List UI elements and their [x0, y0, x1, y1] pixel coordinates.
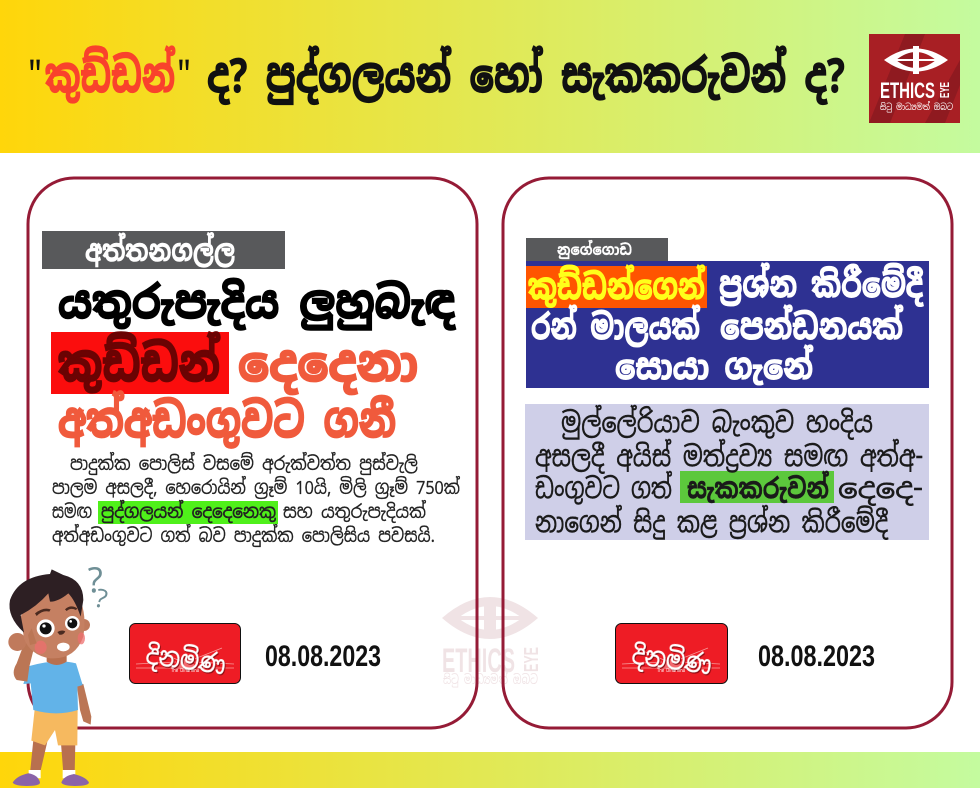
panel: right clipping — [503, 178, 952, 728]
Dinamina logo right: දිනමිණ — [630, 637, 714, 682]
location tag right — [526, 238, 668, 261]
boy face — [21, 588, 84, 658]
body text left: පුද්ගලයන් දෙදෙනෙකු — [101, 500, 276, 524]
boy shoes — [13, 773, 89, 786]
boy socks — [29, 770, 75, 778]
watermark logo: ETHICS — [442, 642, 515, 680]
Ethics Eye logo: ETHICS — [880, 78, 935, 103]
body box right: සැකකරුවන් — [687, 470, 830, 507]
body text left: සමඟ — [52, 500, 92, 524]
boy neck — [47, 653, 67, 665]
boy hair — [9, 569, 83, 633]
Dinamina logo left — [130, 624, 240, 684]
watermark logo — [442, 597, 543, 688]
boy fingers — [28, 628, 37, 645]
location tag right: නුගේගොඩ — [557, 240, 632, 260]
body box right: නාගෙන් සිදු කළ ප්‍රශ්න කිරීමේදී — [535, 504, 889, 541]
date right: 08.08.2023 — [758, 640, 875, 673]
question marks — [87, 559, 111, 617]
boy legs — [30, 740, 75, 773]
headline box right: සොයා ගැනේ — [615, 344, 814, 390]
question marks: ? — [87, 559, 103, 604]
headline line 3: අත්අඩංගුවට ගනී — [58, 389, 396, 451]
boy eyes — [37, 616, 80, 637]
body box right: මුල්ලේරියාව බැංකුව හංදිය — [561, 405, 873, 441]
headline line 2 — [51, 330, 418, 396]
Ethics Eye logo: EYE — [937, 82, 952, 98]
headline line 2: දෙදෙනා — [238, 330, 418, 396]
headline box right: කුඩ්ඩන්ගෙන් — [528, 264, 706, 310]
title: කුඩ්ඩන් — [45, 44, 175, 106]
Dinamina logo right: The Dinamina — [657, 668, 685, 674]
body box right: දෙදෙ- — [838, 471, 923, 507]
body text left — [52, 451, 460, 548]
boy brow and nose — [35, 606, 77, 635]
Dinamina logo left: දිනමිණ — [144, 637, 228, 682]
boy mouth — [57, 643, 70, 651]
watermark logo: සිටු මාධ්‍යමත් ඔබට — [443, 671, 538, 688]
header band — [0, 0, 980, 153]
title — [28, 44, 845, 106]
headline box right: පෙන්ඩනයක් — [720, 304, 903, 350]
Dinamina logo right — [616, 624, 728, 684]
date left: 08.08.2023 — [265, 640, 381, 673]
question marks: ? — [91, 581, 111, 617]
body text left: පාලම අසලදී, හෙරොයින් ග්‍රෑම් 10යි, මිලි ග්‍රෑම් 750ක් — [52, 475, 460, 500]
boy right arm — [77, 683, 91, 725]
headline line 1: යතුරුපැදිය ලුහුබැඳ — [58, 274, 456, 332]
boy shorts — [31, 709, 78, 745]
body box right: ඩංගුවට ගත් — [535, 470, 672, 507]
headline box right — [526, 261, 929, 390]
title: " — [177, 52, 191, 104]
body text left: සහ යතුරුපැදියක් — [283, 500, 426, 524]
title: " — [28, 52, 42, 104]
boy raised arm — [14, 635, 36, 682]
Dinamina logo left: The Dinamina — [171, 668, 199, 674]
headline line 2: කුඩ්ඩන් — [58, 330, 220, 396]
panel: left clipping — [28, 178, 477, 728]
Ethics Eye logo — [869, 34, 960, 123]
icon: confused boy — [8, 559, 111, 786]
location tag left: අත්තනගල්ල — [85, 232, 235, 270]
body text left: පාදුක්ක පොලිස් වසමේ අරුක්වත්ත පුස්වැලි — [70, 451, 418, 476]
boy ears — [8, 619, 90, 651]
headline box right: රන් මාලයක් — [531, 304, 700, 350]
watermark logo: EYE — [521, 647, 543, 672]
Ethics Eye logo: සිටු මාධ්‍යමත් ඔබට — [880, 101, 953, 113]
body text left: අත්අඩංගුවට ගත් බව පාදුක්ක පොලිසිය පවසයි. — [52, 524, 435, 548]
boy shirt — [23, 661, 83, 713]
boy cheeks — [35, 632, 85, 654]
footer band — [0, 752, 980, 788]
body box right — [525, 404, 929, 541]
headline box right: ප්‍රශ්න කිරීමේදී — [719, 262, 923, 308]
